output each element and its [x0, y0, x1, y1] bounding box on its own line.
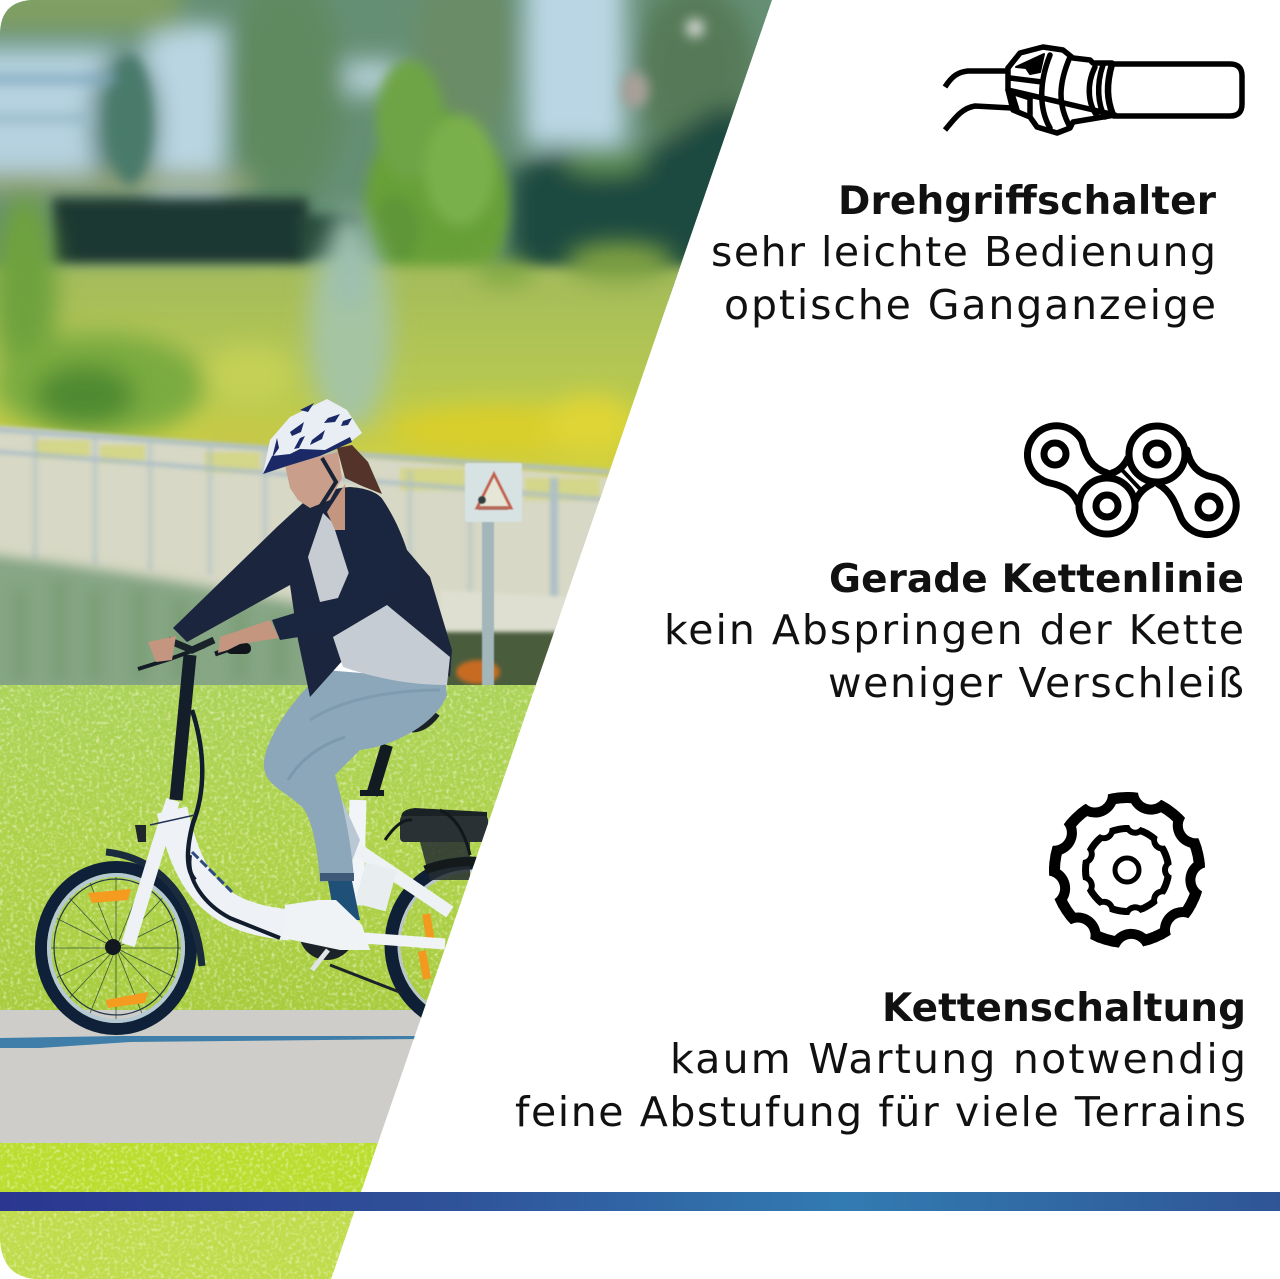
text: Kettenschaltung: Kettenschaltung: [882, 986, 1246, 1031]
text: Gerade Kettenlinie: [664, 557, 1244, 707]
rider: legs in jeans: [264, 670, 447, 882]
rider: face, neck and hair: [285, 445, 382, 530]
photo background: meadow and bushes: [0, 195, 760, 496]
rider: grey t-shirt: [308, 513, 450, 685]
text: Kettenschaltung: [515, 986, 1246, 1136]
text: Gerade Kettenlinie: kein Abspringen der Kette: [664, 606, 1244, 654]
text: Kettenschaltung: kaum Wartung notwendig: [670, 1035, 1246, 1083]
text: Kettenschaltung: feine Abstufung für viele Terrains: [515, 1088, 1246, 1136]
road sign on post: [465, 463, 522, 690]
rider: near arm sleeve: [272, 530, 350, 640]
text: Gerade Kettenlinie: Gerade Kettenlinie: [829, 557, 1244, 602]
text: Drehgriffschalter: [711, 179, 1217, 329]
icon: twist grip shifter: [945, 47, 1242, 133]
rear rack and battery: [385, 808, 488, 880]
gradient bar: [0, 1192, 1280, 1211]
text: Drehgriffschalter: sehr leichte Bedienung: [711, 228, 1216, 276]
handlebar stem and grips: [138, 640, 251, 800]
photo background: fence, reeds and walkway: [0, 423, 660, 700]
text: Gerade Kettenlinie: weniger Verschleiß: [828, 659, 1244, 707]
icon: derailleur gears: [1049, 792, 1205, 948]
lower lawn strip: [0, 1143, 400, 1279]
icon: bicycle chain links: [1027, 426, 1236, 535]
road with wheel shadow: [0, 1010, 440, 1145]
text: Drehgriffschalter: Drehgriffschalter: [838, 179, 1217, 224]
lawn: [0, 685, 560, 1011]
rider: hands and arm: [148, 620, 279, 662]
front wheel: [41, 852, 202, 1030]
rear wheel: [384, 856, 477, 1018]
rider: jacket: [173, 487, 452, 697]
photo background: blurred trees and buildings: [0, 0, 790, 304]
seat post and saddle: [360, 713, 436, 796]
text: Drehgriffschalter: optische Ganganzeige: [724, 281, 1216, 329]
photo: woman riding a folding e-bike: [0, 0, 790, 1279]
rider: shoe and sock: [283, 881, 370, 950]
bike frame, white: [128, 710, 450, 945]
crank, chainring and chain: [300, 942, 402, 994]
rider: bike helmet: [263, 399, 362, 474]
